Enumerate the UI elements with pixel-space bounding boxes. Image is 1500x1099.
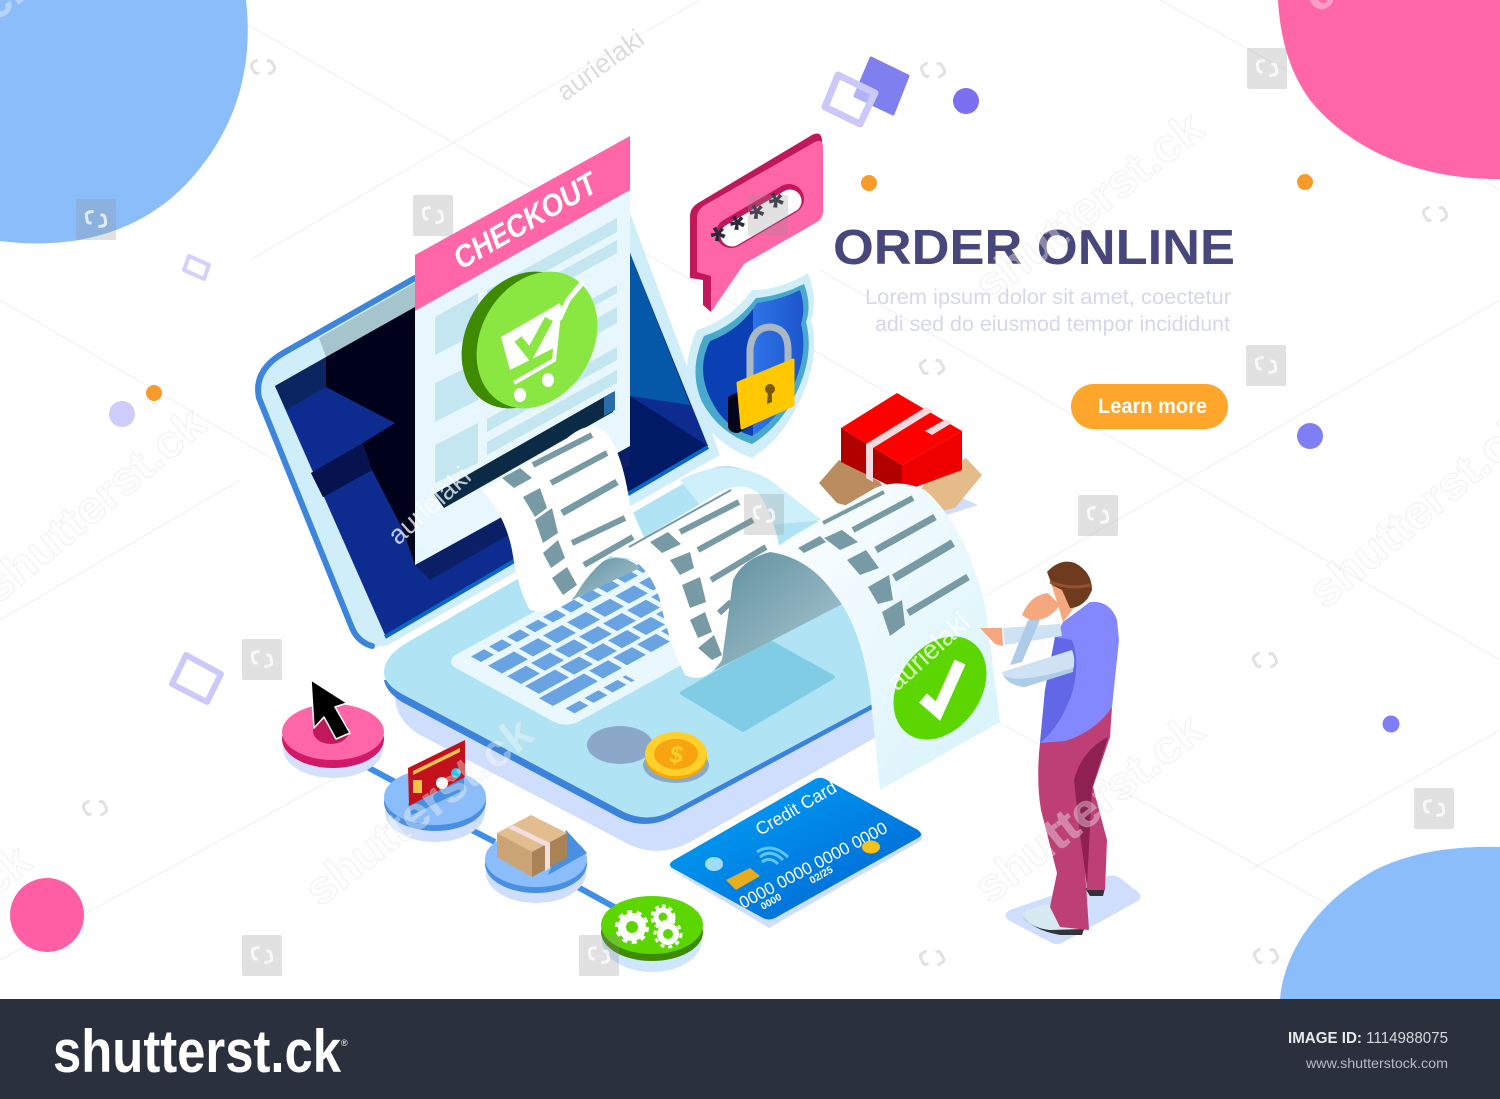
cart badge bbox=[438, 250, 621, 430]
laptop bbox=[258, 213, 920, 851]
parcel shadow bbox=[835, 490, 978, 530]
screen display bbox=[275, 253, 708, 635]
fingerprint spot bbox=[587, 726, 653, 764]
checkout label: CHECKOUT bbox=[447, 164, 605, 276]
padlock bbox=[728, 327, 793, 433]
parcel bbox=[819, 393, 982, 530]
laptop shadow bbox=[395, 640, 880, 851]
pointing hand bbox=[980, 628, 1003, 646]
blob: top-left blue bbox=[0, 0, 248, 243]
dark screen areas bbox=[311, 307, 415, 565]
decorative dots bbox=[10, 88, 1400, 952]
subtitle line 2: adi sed do eiusmod tempor incididunt bbox=[875, 313, 1230, 336]
footer url: www.shutterstock.com bbox=[1305, 1055, 1448, 1071]
card title: Credit Card bbox=[752, 777, 840, 839]
icon: gears bbox=[617, 906, 681, 947]
bezel outer edge bbox=[258, 278, 415, 646]
footer bar bbox=[0, 999, 1500, 1099]
watermarks: aurielaki bbox=[551, 23, 650, 107]
blob: bottom-right blue bbox=[1280, 847, 1500, 999]
document sheet bbox=[415, 136, 630, 565]
lower sleeve bbox=[1002, 650, 1074, 687]
card number: 0000 0000 0000 0000 bbox=[736, 818, 891, 913]
raised hand bbox=[1022, 593, 1060, 620]
receipt first fold bbox=[482, 427, 651, 611]
card light bbox=[705, 857, 723, 871]
box tape bbox=[866, 407, 933, 482]
document shadow bbox=[415, 440, 630, 580]
approved check badge bbox=[874, 619, 1006, 757]
red box top bbox=[841, 393, 962, 465]
laptop base bbox=[384, 466, 920, 818]
password field bbox=[731, 199, 789, 233]
step: card disc bbox=[384, 769, 486, 842]
shirt bbox=[1040, 602, 1119, 743]
step: box disc bbox=[485, 830, 587, 903]
step: pink disc bbox=[282, 704, 384, 778]
floor tile bbox=[1005, 875, 1141, 944]
receipt bbox=[482, 427, 1006, 790]
red box left bbox=[841, 428, 902, 492]
person bbox=[980, 562, 1141, 944]
button bbox=[1071, 384, 1228, 429]
laptop base edge bbox=[384, 660, 880, 824]
watermarks: shutterst.ck bbox=[964, 702, 1213, 913]
watermarks: aurielaki bbox=[881, 607, 976, 696]
password stars: **** bbox=[704, 184, 797, 262]
watermarks: shutterst.ck bbox=[964, 100, 1213, 311]
step: gears disc bbox=[601, 896, 703, 972]
keyboard bbox=[444, 542, 783, 728]
shoes bbox=[1022, 888, 1105, 935]
hair bbox=[1047, 562, 1092, 608]
connector lines bbox=[358, 762, 616, 908]
neck bbox=[1050, 580, 1080, 622]
icon: cardboard box bbox=[497, 815, 567, 877]
credit card bbox=[668, 777, 922, 928]
checkout header bbox=[415, 136, 630, 311]
security shield bbox=[687, 273, 814, 458]
trackpad bbox=[682, 642, 833, 730]
form lines bbox=[487, 218, 617, 455]
printer slot bbox=[434, 392, 613, 508]
decorative diamonds bbox=[172, 58, 908, 702]
receipt third fold bbox=[770, 483, 1000, 790]
watermarks: aurielaki bbox=[382, 461, 477, 550]
open cardboard box bbox=[819, 460, 900, 520]
shirt shadow bbox=[1040, 637, 1076, 743]
headline: ORDER ONLINE bbox=[833, 221, 1235, 275]
trousers bbox=[1038, 707, 1112, 930]
card gold dot bbox=[862, 840, 880, 854]
checkout document bbox=[415, 136, 630, 580]
icon: cursor bbox=[311, 680, 350, 739]
upper sleeve bbox=[1003, 624, 1062, 645]
reflection band bbox=[319, 283, 415, 357]
password bubble bbox=[690, 134, 823, 312]
hinge highlight bbox=[680, 468, 822, 530]
forearm fold bbox=[1010, 620, 1040, 665]
card chip bbox=[726, 868, 760, 890]
receipt line items bbox=[533, 435, 968, 613]
receipt second fold bbox=[620, 487, 780, 678]
form squares bbox=[435, 293, 478, 483]
cart icon bbox=[501, 283, 582, 402]
subtitle line 1: Lorem ipsum dolor sit amet, coectetur bbox=[865, 286, 1231, 309]
blob: top-right pink bbox=[1278, 0, 1500, 179]
watermarks: shutterst.ck bbox=[294, 705, 543, 916]
card small text: 0000 bbox=[759, 892, 784, 913]
receipt underside arches bbox=[572, 558, 640, 600]
laptop screen bezel bbox=[258, 213, 720, 647]
receipt squares bbox=[502, 468, 905, 660]
footer registered mark: ® bbox=[341, 1038, 348, 1048]
coin: $ bbox=[668, 742, 683, 769]
contactless symbol bbox=[757, 848, 788, 864]
button: Learn more bbox=[1098, 395, 1207, 418]
footer image id: IMAGE ID: 1114988075 bbox=[1288, 1030, 1448, 1047]
icon: red card bbox=[408, 740, 465, 806]
card expiry: 02/25 bbox=[808, 864, 836, 887]
footer logo: shutterst.ck bbox=[53, 1018, 342, 1085]
coin bbox=[643, 732, 709, 783]
red box right bbox=[902, 431, 962, 492]
trouser shadow bbox=[1074, 737, 1108, 885]
